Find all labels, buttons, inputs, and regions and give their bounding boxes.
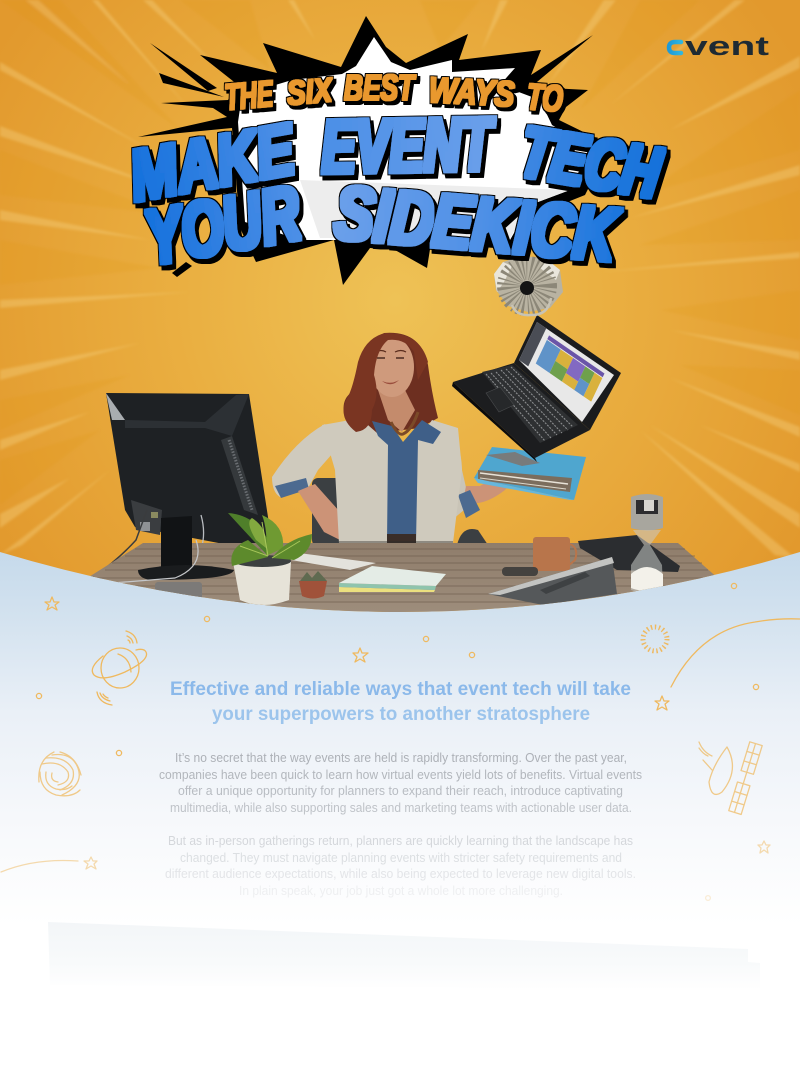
text block: paragraph two xyxy=(165,834,636,898)
icon: satellite xyxy=(699,742,762,814)
icon: planet xyxy=(92,631,147,705)
icon: sun ring xyxy=(643,627,667,651)
laptop screen schedule cells xyxy=(519,322,606,408)
forearm and hand on hip xyxy=(298,484,339,540)
icon: star top left xyxy=(45,597,59,610)
title: MAKE EVENT TECH YOUR SIDEKICK: TECH xyxy=(514,112,667,214)
blue denim shirt xyxy=(372,420,441,543)
icon: notebook xyxy=(339,566,446,592)
neck xyxy=(378,390,415,432)
text block: paragraph one: companies have been quick to learn how virtual events yield lots of benefits. Virtual events xyxy=(159,768,642,782)
woman at desk xyxy=(272,333,510,544)
right arm and hand xyxy=(456,456,466,516)
front hair xyxy=(344,333,428,432)
title: MAKE EVENT TECH YOUR SIDEKICK xyxy=(124,102,667,282)
panel: lower intro background xyxy=(0,540,800,925)
icon: flying laptop xyxy=(452,315,621,462)
light and dark sunburst rays xyxy=(0,0,800,558)
title: MAKE EVENT TECH YOUR SIDEKICK: MAKE xyxy=(124,109,302,217)
title: THE SIX BEST WAYS TO xyxy=(223,67,564,120)
monitor xyxy=(92,393,272,582)
title: MAKE EVENT TECH YOUR SIDEKICK: YOUR xyxy=(139,168,307,282)
heading: Effective and reliable ways that event tech will take xyxy=(170,679,631,700)
icon: potted plant xyxy=(228,513,312,605)
left arm sleeve xyxy=(272,424,331,497)
text block: paragraph two: different audience expectations, while also being expected to leverage new digital tools. xyxy=(165,867,636,881)
text block: paragraph two: changed. They must navigate planning events with stricter safety requirements and xyxy=(180,851,622,865)
text block: paragraph two: In plain speak, your job just got a whole lot more challenging. xyxy=(239,884,563,898)
pine cone xyxy=(502,567,538,576)
heading xyxy=(170,679,631,725)
text block: paragraph one: multimedia, while also supporting sales and marketing teams with actionable user data. xyxy=(170,801,632,815)
icon: coffee mug xyxy=(533,537,576,571)
title: THE SIX BEST WAYS TO: THE xyxy=(223,73,275,118)
text block: paragraph one xyxy=(159,751,642,815)
dark folder xyxy=(578,535,680,572)
white keyboard xyxy=(291,552,376,570)
space doodles xyxy=(36,583,800,756)
panel: orange hero with desk scene xyxy=(0,0,800,680)
desk clutter: camera xyxy=(155,582,202,598)
heading: your superpowers to another stratosphere xyxy=(212,704,590,725)
necklace xyxy=(391,412,418,434)
title: THE SIX BEST WAYS TO: WAYS xyxy=(428,69,516,114)
cardigan xyxy=(322,418,462,543)
icon: star lower right xyxy=(758,841,770,853)
desk xyxy=(90,543,714,612)
text block: paragraph one: offer a unique opportunity for planners to expand their reach, introduce captivating xyxy=(178,784,623,798)
icon: desk phone xyxy=(488,557,617,605)
icon: flying blue binder xyxy=(474,447,586,500)
faded next panel xyxy=(48,922,760,990)
text block: paragraph one: It’s no secret that the way events are held is rapidly transforming. Over the past year, xyxy=(175,751,627,765)
title: MAKE EVENT TECH YOUR SIDEKICK: EVENT xyxy=(321,102,496,190)
icon: flying rolodex xyxy=(494,256,563,315)
text block: paragraph two: But as in-person gatherings return, planners are quickly learning that the landscape has xyxy=(168,834,633,848)
faded doodles lower xyxy=(1,841,770,900)
office chair xyxy=(312,478,488,546)
logo: cvent xyxy=(669,31,769,61)
title: THE SIX BEST WAYS TO: TO xyxy=(525,76,564,120)
icon: galaxy spiral xyxy=(39,752,81,796)
logo: cvent: vent xyxy=(685,31,769,61)
small dots xyxy=(36,583,759,756)
sunburst background xyxy=(0,0,800,680)
icon: star centre xyxy=(353,648,368,662)
title: MAKE EVENT TECH YOUR SIDEKICK: SIDEKICK xyxy=(332,170,624,278)
starburst behind title xyxy=(138,16,610,285)
shooting star arc right xyxy=(671,619,800,687)
icon: hourglass xyxy=(631,494,663,592)
icon: shooting star left xyxy=(1,860,78,872)
face xyxy=(374,340,414,397)
icon: star right xyxy=(655,696,669,710)
title: THE SIX BEST WAYS TO: BEST xyxy=(344,67,416,108)
monitor base on desk xyxy=(118,540,234,583)
icon: small succulent xyxy=(299,571,327,598)
dot lower right xyxy=(706,896,710,900)
back hair xyxy=(344,333,438,435)
title: THE SIX BEST WAYS TO: SIX xyxy=(285,71,335,113)
